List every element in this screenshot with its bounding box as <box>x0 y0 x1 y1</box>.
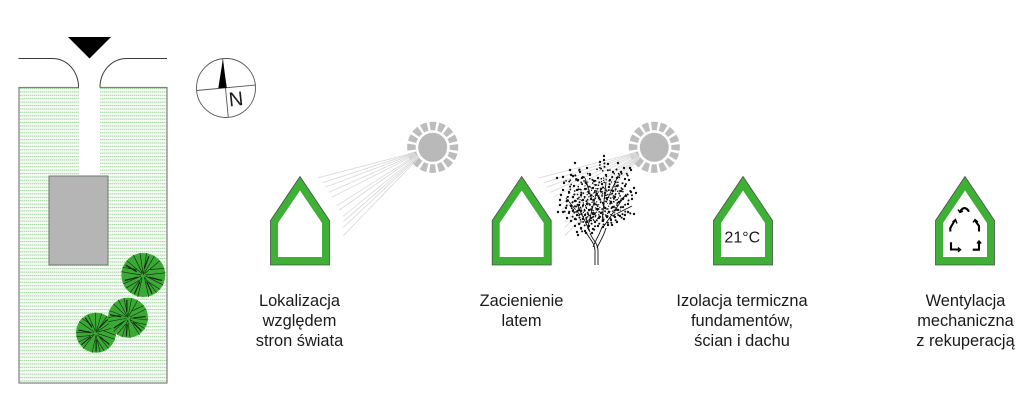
panel: summer shading <box>480 126 676 330</box>
icon: house <box>714 176 772 265</box>
panel: mechanical ventilation <box>916 176 1016 350</box>
ventilation arrows <box>950 208 981 252</box>
plot of land <box>18 37 167 383</box>
icon: house <box>270 176 330 265</box>
road edge lines <box>18 58 167 88</box>
panel: orientation <box>256 126 454 350</box>
caption: względem <box>262 312 336 330</box>
caption: fundamentów, <box>691 312 793 330</box>
caption: latem <box>501 312 542 330</box>
icon: tree <box>557 156 636 265</box>
icon: sun <box>411 126 454 169</box>
compass <box>196 58 256 118</box>
caption: Lokalizacja <box>259 292 341 310</box>
compass: N <box>228 88 244 111</box>
caption: Izolacja termiczna <box>676 292 808 310</box>
building footprint <box>49 176 108 265</box>
caption: stron świata <box>256 332 344 350</box>
caption: ścian i dachu <box>694 332 790 350</box>
trees on the plot <box>69 253 165 359</box>
caption: Wentylacja <box>926 292 1006 310</box>
temperature label: 21°C <box>724 230 760 246</box>
caption: mechaniczna <box>917 312 1015 330</box>
entrance marker triangle <box>68 37 111 58</box>
driveway <box>79 80 100 176</box>
icon: house <box>492 176 551 265</box>
sun rays <box>318 153 419 236</box>
icon: house <box>936 176 994 265</box>
caption: z rekuperacją <box>916 332 1016 350</box>
panel: thermal insulation <box>676 176 808 350</box>
caption: Zacienienie <box>480 292 563 310</box>
sun rays <box>540 153 640 236</box>
icon: sun <box>633 126 676 169</box>
